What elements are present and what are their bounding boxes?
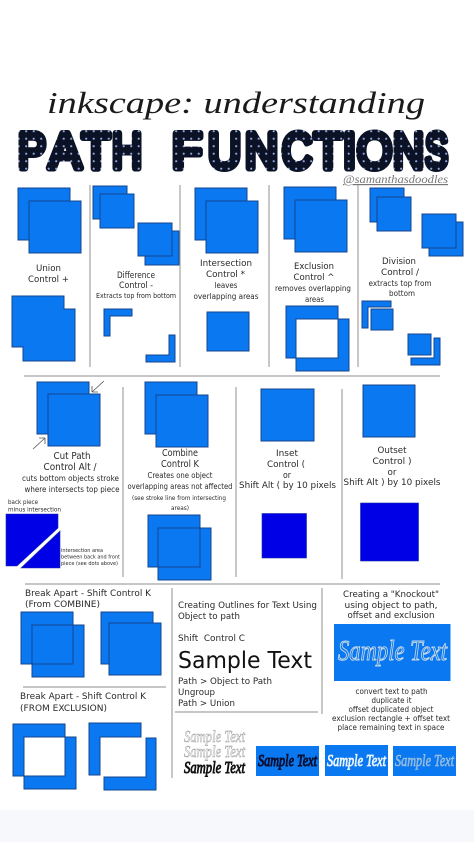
title: main heading: T [82, 123, 110, 179]
panel: creating outlines for text: Creating Outlines for Text Using [178, 601, 317, 611]
panel: outset: or [388, 468, 397, 478]
title: main heading: T [314, 123, 342, 179]
title: main heading [18, 123, 448, 179]
script text samples [184, 727, 246, 777]
panel: inset: or [283, 471, 291, 481]
panel: combine: Creates one object [148, 471, 212, 480]
panel: cut path: minus intersection [8, 508, 61, 514]
panel: division [362, 188, 463, 365]
panel: division: bottom [389, 289, 415, 298]
panel: cut path: cuts bottom objects stroke [22, 474, 119, 483]
title: main heading: O [357, 123, 392, 179]
panel: break apart from exclusion [13, 692, 156, 790]
panel: knockout: Creating a "Knockout" [343, 590, 439, 600]
panel: combine: Control K [161, 459, 200, 470]
panel: cut path: where intersects top piece [24, 485, 120, 494]
knockout sample: white text: Sample Text [327, 751, 387, 770]
panel: difference: Control - [119, 280, 153, 290]
panel: creating outlines for text: Path > Union [178, 699, 235, 709]
panel: exclusion: Exclusion [294, 262, 334, 272]
title: main heading: N [245, 123, 278, 179]
panel: outset: Outset [378, 446, 407, 456]
panel: outset: Shift Alt ) by 10 pixels [344, 478, 441, 488]
knockout sample: white text [325, 745, 388, 776]
panel: division: Division [382, 257, 416, 267]
title: main heading: N [393, 123, 424, 179]
panel: inset: Shift Alt ( by 10 pixels [239, 481, 336, 491]
panel: cut path: piece (see dots above) [61, 561, 118, 567]
panel: exclusion: removes overlapping [275, 284, 351, 293]
title: main heading: C [282, 123, 312, 179]
panel: break apart from exclusion: (FROM EXCLUSION) [20, 704, 107, 714]
panel: combine: (see stroke line from intersecting [132, 495, 226, 502]
panel: intersection [194, 188, 258, 351]
panel: inset [239, 389, 336, 558]
panel: combine: areas) [171, 505, 189, 512]
panel: difference: Difference [117, 270, 155, 280]
panel: creating outlines for text [178, 601, 317, 709]
script text samples: Sample Text [184, 727, 246, 746]
panel: cut path [6, 381, 120, 568]
panel: creating outlines for text: Sample Text [178, 648, 312, 674]
knockout sample: outline text [393, 746, 456, 776]
panel: combine: overlapping areas not affected [128, 482, 232, 491]
panel: difference: Extracts top from bottom [96, 292, 176, 300]
panel: division: Control / [381, 268, 420, 278]
panel: cut path: Control Alt / [44, 462, 97, 473]
panel: intersection: Control * [206, 270, 245, 280]
panel: cut path: Cut Path [54, 451, 91, 462]
panel: union: Control + [28, 275, 69, 285]
panel: combine: Combine [162, 448, 198, 459]
title: main heading: U [208, 123, 241, 179]
knockout sample: black text: Sample Text [258, 751, 318, 770]
panel: inset: Inset [276, 449, 298, 459]
credit handle: @samanthasdoodles [343, 172, 448, 186]
panel: knockout: Sample Text [338, 636, 448, 667]
panel: creating outlines for text: Path > Object to Path [178, 677, 272, 687]
knockout sample: black text [256, 746, 319, 776]
panel: intersection: overlapping areas [194, 292, 258, 301]
panel: division: extracts top from [368, 279, 432, 288]
title: main heading: A [49, 123, 82, 179]
panel: creating outlines for text: Ungroup [178, 688, 215, 698]
title: main heading: P [18, 123, 46, 179]
panel: difference [93, 186, 179, 362]
panel: exclusion: areas [305, 295, 324, 304]
panel: intersection: leaves [214, 281, 238, 290]
title: main heading: S [425, 123, 448, 179]
panel: cut path: back piece [8, 500, 38, 506]
panel: knockout [332, 590, 450, 732]
panel: knockout: using object to path, [344, 601, 438, 611]
title: main heading: H [112, 123, 142, 179]
panel: cut path: intersection area [61, 548, 103, 554]
panel: knockout: convert text to path [356, 687, 428, 696]
panel: knockout: duplicate it [372, 696, 412, 705]
panel: knockout: offset duplicated object [348, 705, 434, 714]
panel: cut path: between back and front [61, 554, 120, 560]
arrow: top right [92, 381, 104, 392]
panel: inset: Control ( [267, 460, 305, 470]
script text samples: Sample Text [184, 742, 246, 761]
panel: exclusion: Control ^ [294, 273, 334, 283]
panel: knockout: exclusion rectangle + offset text [332, 714, 450, 723]
panel: knockout: offset and exclusion [348, 611, 434, 621]
panel: creating outlines for text: Shift Control C [178, 634, 245, 644]
title: script line: inkscape: understanding [47, 85, 425, 120]
panel: outset [344, 385, 441, 561]
panel: creating outlines for text: Object to path [178, 612, 240, 622]
panel: combine [128, 382, 232, 580]
script text samples: Sample Text [184, 758, 246, 777]
panel: break apart from combine [21, 589, 161, 677]
panel: outset: Control ) [372, 457, 412, 467]
panel: union [12, 188, 81, 361]
panel: exclusion [275, 187, 351, 371]
title: main heading: F [172, 123, 202, 179]
title: main heading: I [343, 123, 356, 179]
panel: break apart from exclusion: Break Apart - Shift Control K [20, 692, 147, 702]
panel: break apart from combine: Break Apart - Shift Control K [25, 589, 152, 599]
panel: intersection: Intersection [200, 259, 252, 269]
panel: union: Union [36, 264, 61, 274]
panel: knockout: place remaining text in space [338, 723, 445, 732]
panel: break apart from combine: (From COMBINE) [25, 600, 100, 610]
arrow: bottom left [33, 438, 45, 449]
